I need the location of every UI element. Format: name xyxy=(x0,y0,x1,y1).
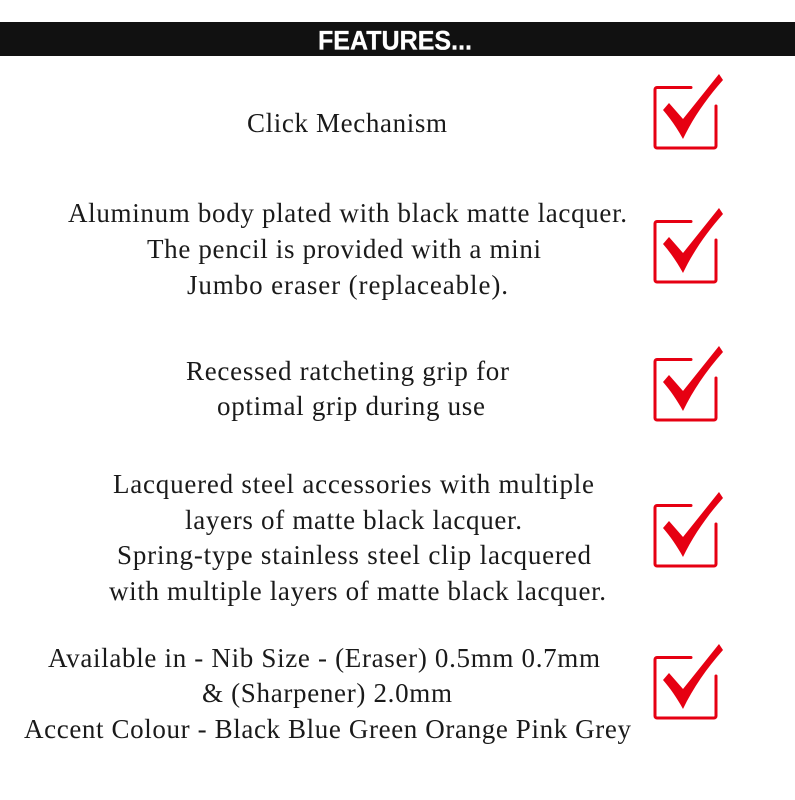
icon: checkbox 3 xyxy=(655,346,723,420)
feature text: aluminum body: Aluminum body plated with black matte lacquer. xyxy=(68,198,627,228)
feature text: recessed grip: optimal grip during use xyxy=(217,391,485,421)
feature text: recessed grip: Recessed ratcheting grip for xyxy=(186,356,509,386)
feature text: aluminum body: The pencil is provided with a mini xyxy=(147,234,541,264)
feature text: recessed grip xyxy=(186,356,509,421)
feature text: lacquered accessories: Lacquered steel accessories with multiple xyxy=(113,469,594,499)
feature text: aluminum body xyxy=(68,198,627,300)
icon: checkbox 5 xyxy=(655,644,723,718)
feature text: lacquered accessories: with multiple layers of matte black lacquer. xyxy=(109,576,606,606)
feature text: availability: Accent Colour - Black Blue Green Orange Pink Grey xyxy=(24,714,632,744)
feature text: lacquered accessories: Spring-type stainless steel clip lacquered xyxy=(117,540,592,570)
icon: checkbox 4 xyxy=(655,492,723,566)
feature text: availability: & (Sharpener) 2.0mm xyxy=(202,678,452,708)
feature text: lacquered accessories: layers of matte black lacquer. xyxy=(185,505,522,535)
header banner xyxy=(0,22,795,56)
feature text: availability xyxy=(24,643,632,744)
icon: checkbox 1 xyxy=(655,74,723,148)
header banner: FEATURES... xyxy=(318,26,472,56)
feature text: click mechanism: Click Mechanism xyxy=(247,108,447,138)
feature text: availability: Available in - Nib Size - (Eraser) 0.5mm 0.7mm xyxy=(48,643,600,673)
feature text: aluminum body: Jumbo eraser (replaceable). xyxy=(187,270,508,300)
feature text: lacquered accessories xyxy=(109,469,606,606)
icon: checkbox 2 xyxy=(655,208,723,282)
